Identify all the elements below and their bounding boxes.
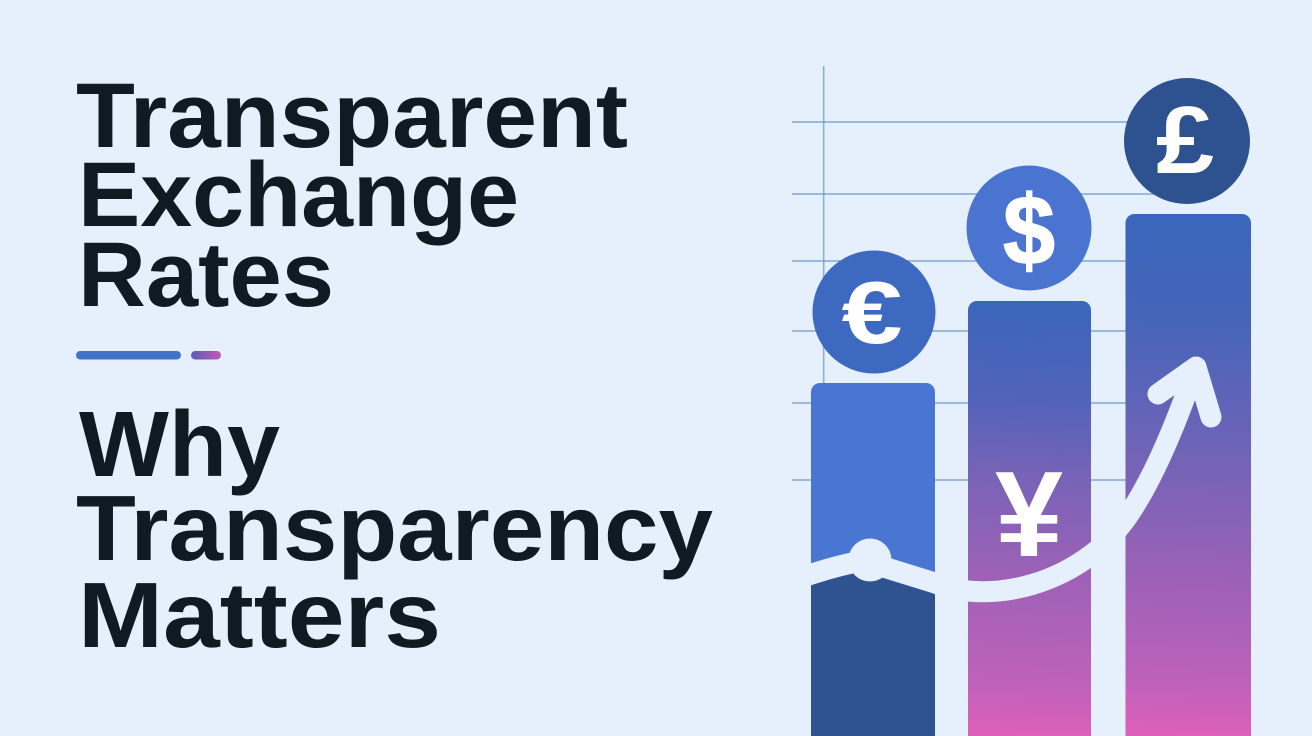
coin: dollar [966,166,1092,290]
chart grid lines [792,66,1160,480]
heading: Transparent Exchange Rates: Rates [78,224,334,326]
heading: Why Transparency Matters: Matters [78,563,441,667]
heading: Why Transparency Matters: Why [79,392,280,496]
heading: Transparent Exchange Rates: Transparent [76,65,628,167]
bar: yen [968,301,1091,736]
rising trend arrow [800,367,1211,592]
coin: euro: € [842,263,902,362]
heading: Why Transparency Matters: Transparency [76,476,713,580]
heading: Transparent Exchange Rates [76,65,628,326]
heading: Why Transparency Matters [76,392,713,667]
yen symbol: ¥ [995,446,1063,582]
coin: euro [812,250,936,374]
heading: Transparent Exchange Rates: Exchange [78,144,519,246]
bar: euro [811,383,935,736]
coin: pound: £ [1156,87,1214,194]
coin: pound [1124,78,1250,204]
bar: pound [1126,214,1251,736]
divider accent [76,351,221,360]
coin: dollar: $ [1003,175,1055,285]
